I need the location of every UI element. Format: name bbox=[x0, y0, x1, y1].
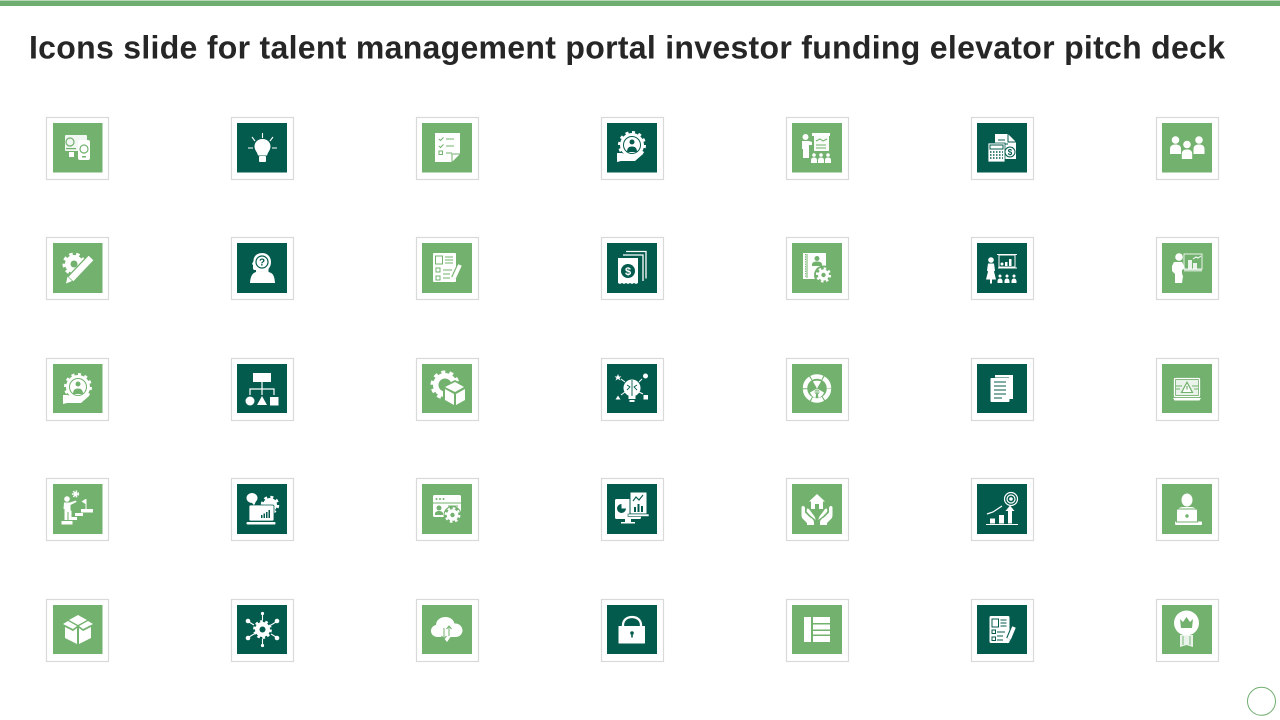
icon: dollar receipts: $ bbox=[625, 266, 631, 278]
icon: resume with pen bbox=[416, 238, 478, 300]
icon: segmented ring bbox=[786, 358, 848, 420]
icon: head with question mark bbox=[232, 238, 294, 300]
page number circle bbox=[1248, 687, 1276, 715]
icon: growth chart to target bbox=[972, 478, 1034, 540]
icon: calculator and invoice bbox=[972, 118, 1034, 180]
icon: monitor and report dashboard bbox=[602, 478, 664, 540]
icon: laptop warning bbox=[1156, 358, 1218, 420]
icon: browser profile with gear bbox=[416, 478, 478, 540]
icon: dollar receipts bbox=[602, 238, 664, 300]
top accent bar bbox=[0, 0, 1280, 6]
icon: padlock bbox=[602, 600, 664, 662]
icon: gear with person in hand, light bbox=[46, 358, 108, 420]
icon: head with question mark: ? bbox=[259, 258, 265, 268]
icon: notebook with person and gear bbox=[786, 238, 848, 300]
icon: brain bulb with shapes bbox=[602, 358, 664, 420]
icon: hands holding house bbox=[786, 478, 848, 540]
icon: presenter with board and audience bbox=[786, 118, 848, 180]
icon: org chart with shapes bbox=[232, 358, 294, 420]
icon: gear network bbox=[232, 600, 294, 662]
title: Icons slide for talent management portal investor funding elevator pitch deck bbox=[29, 30, 1225, 66]
icon: cloud upload download bbox=[416, 600, 478, 662]
icon: open box bbox=[46, 600, 108, 662]
icon: stacked documents bbox=[972, 358, 1034, 420]
icon: checklist page bbox=[416, 118, 478, 180]
icon: calculator and invoice: $ bbox=[1008, 148, 1013, 157]
icon: three people bbox=[1156, 118, 1218, 180]
icon: gear with person in hand bbox=[602, 118, 664, 180]
icon: money card and phone bbox=[46, 118, 108, 180]
icon: laptop with bubble and gear bbox=[232, 478, 294, 540]
icon: woman presenting chart to audience bbox=[972, 238, 1034, 300]
icon: climbing stairs to goal bbox=[46, 478, 108, 540]
icon: light bulb bbox=[232, 118, 294, 180]
icon: resume with pen, dark bbox=[972, 600, 1034, 662]
icon: gear and pencil bbox=[46, 238, 108, 300]
icon: person with growth chart bbox=[1156, 238, 1218, 300]
icon: list layout bbox=[786, 600, 848, 662]
icon: person at laptop bbox=[1156, 478, 1218, 540]
icon: gear and cube bbox=[416, 358, 478, 420]
icon: medal with crown bbox=[1156, 600, 1218, 662]
